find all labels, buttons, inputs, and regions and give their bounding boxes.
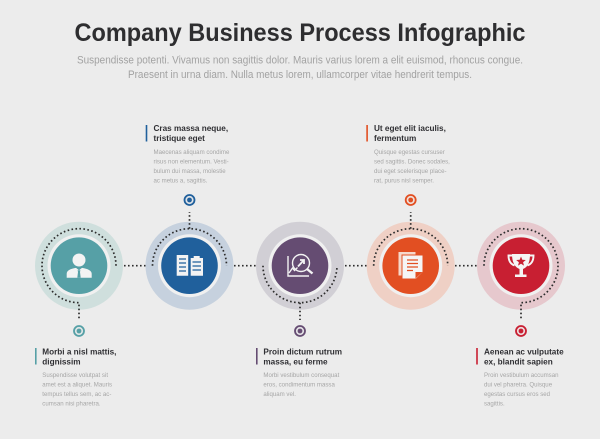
connector: step 2 to step 3 xyxy=(226,265,264,267)
text block: step 5: sagittis. xyxy=(484,400,505,408)
text block: step 1 xyxy=(35,348,116,408)
text block: step 2: Cras massa neque, xyxy=(154,124,228,133)
step 4 pin xyxy=(406,195,416,205)
title: Company Business Process Infographic xyxy=(74,19,526,47)
text block: step 4: sed sagittis. Donec sodales, xyxy=(374,158,450,166)
text block: step 2: Maecenas aliquam condime xyxy=(154,149,230,156)
step 1 pin xyxy=(74,326,84,336)
text block: step 1: amet est a aliquet. Mauris xyxy=(42,382,112,388)
text block: step 1: cumsan nisi pharetra. xyxy=(42,400,101,408)
step 3 pin xyxy=(295,326,305,336)
text block: step 3: aliquam vel. xyxy=(263,391,296,398)
step 1 circle xyxy=(35,222,123,320)
text block: step 4: dui eget scelerisque place- xyxy=(374,168,446,175)
icon: trophy xyxy=(508,254,534,277)
text block: step 5: ex, blandit sapien xyxy=(484,358,553,366)
text block: step 5: Aenean ac vulputate xyxy=(484,348,564,356)
text block: step 5: dui vel pharetra. Quisque xyxy=(484,382,553,388)
icon: person xyxy=(67,254,92,278)
step 4 circle xyxy=(367,212,455,310)
icon: documents xyxy=(398,252,422,278)
text block: step 5 xyxy=(476,348,564,408)
text block: step 3: massa, eu ferme xyxy=(263,358,328,366)
text block: step 1: Morbi a nisl mattis, xyxy=(42,348,116,356)
text block: step 4: Ut eget elit iaculis, xyxy=(374,124,446,133)
step 2 pin xyxy=(184,195,194,205)
text block: step 2: tristique eget xyxy=(154,134,205,143)
step 3 circle xyxy=(256,222,344,320)
connector: step 3 to step 4 xyxy=(337,265,374,267)
step 5 pin xyxy=(516,326,526,336)
text block: step 3: eros, condimentum massa xyxy=(263,382,335,388)
text block: step 5: Proin vestibulum accumsan xyxy=(484,372,559,379)
icon: buildings xyxy=(177,255,203,276)
text block: step 3: Morbi vestibulum consequat xyxy=(263,372,340,379)
connector: step 1 to step 2 xyxy=(116,265,153,267)
text block: step 5: egestas cursus eros sed xyxy=(484,391,550,398)
text block: step 1: dignissim xyxy=(42,358,81,366)
text block: step 3: Proin dictum rutrum xyxy=(263,348,342,356)
text block: step 2: risus non elementum. Vesti- xyxy=(154,158,229,166)
subtitle: Praesent in urna diam. Nulla metus lorem, ullamcorper vitae hendrerit tempus. xyxy=(128,69,472,81)
connector: step 4 to step 5 xyxy=(447,265,484,267)
icon: chart with magnifier xyxy=(288,254,312,276)
step 2 circle xyxy=(146,212,234,310)
text block: step 3 xyxy=(256,348,342,398)
text block: step 4: fermentum xyxy=(374,134,416,143)
text block: step 1: tempus tellus sem, ac ac- xyxy=(42,391,111,398)
text block: step 2: bulum dui massa, molestie xyxy=(154,168,226,175)
text block: step 4 xyxy=(366,124,450,184)
text block: step 4: Quisque egestas cursuser xyxy=(374,149,445,156)
text block: step 4: rat, purus nisl semper. xyxy=(374,178,434,184)
step 5 circle xyxy=(477,222,565,320)
text block: step 1: Suspendisse volutpat sit xyxy=(42,372,108,379)
text block: step 2: ac metus a, sagittis. xyxy=(154,178,208,184)
subtitle xyxy=(77,54,523,81)
subtitle: Suspendisse potenti. Vivamus non sagittis dolor. Mauris varius lorem a elit euismod, rhoncus congue. xyxy=(77,54,523,66)
text block: step 2 xyxy=(146,124,230,184)
